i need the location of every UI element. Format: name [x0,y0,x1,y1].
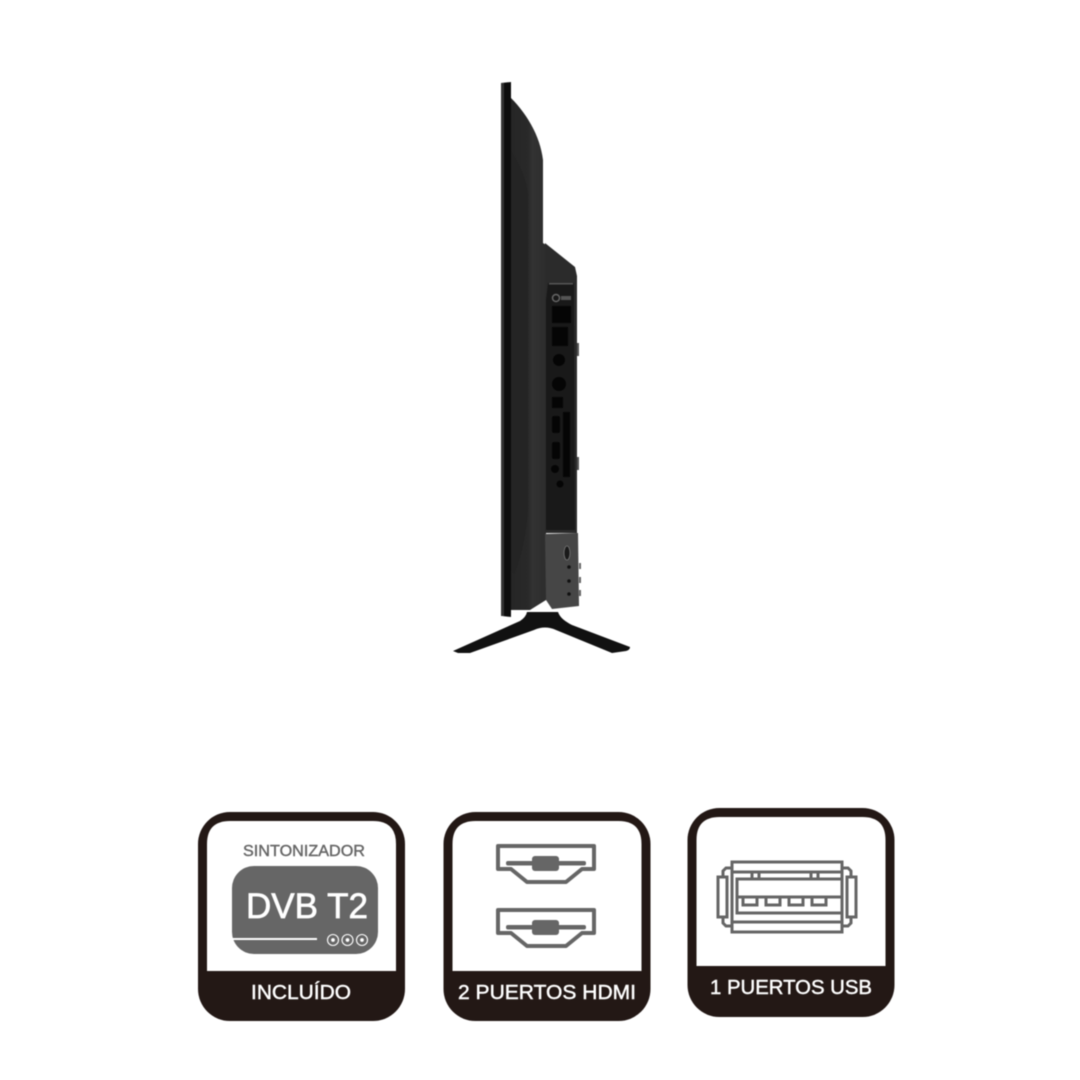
connector housing [545,243,577,533]
front panel bezel [501,82,511,617]
badge interior [207,821,396,971]
bezel edge [501,83,504,616]
icon: HDMI connector top [498,846,594,882]
plate line [232,938,317,940]
badge frame [688,808,894,1017]
three dials [328,934,368,946]
badge interior [696,817,886,966]
badge: DVB T2 tuner [198,812,405,1021]
badge interior [452,821,642,971]
caption: 2 PUERTOS HDMI: 2 PUERTOS HDMI [458,982,636,1004]
control module [545,533,579,609]
badge frame [444,812,650,1021]
caption: INCLUÍDO: INCLUÍDO [251,981,351,1004]
control details [564,546,581,596]
heading: SINTONIZADOR: SINTONIZADOR [243,843,365,860]
icon: USB connector [718,862,856,932]
gray DVB plate [232,866,378,954]
stand [453,612,630,653]
text: DVB T2: DVB T2 [246,887,368,926]
rear body [511,98,546,610]
badge frame [198,812,405,1021]
body shading [511,150,528,575]
badge: HDMI ports [444,812,650,1021]
side buttons [577,343,579,470]
badge: USB port [688,808,894,1017]
port panel [546,283,575,530]
icon: HDMI connector bottom [498,910,594,946]
caption: 1 PUERTOS USB: 1 PUERTOS USB [710,977,872,999]
ports [549,283,573,488]
TV side view [453,82,630,653]
